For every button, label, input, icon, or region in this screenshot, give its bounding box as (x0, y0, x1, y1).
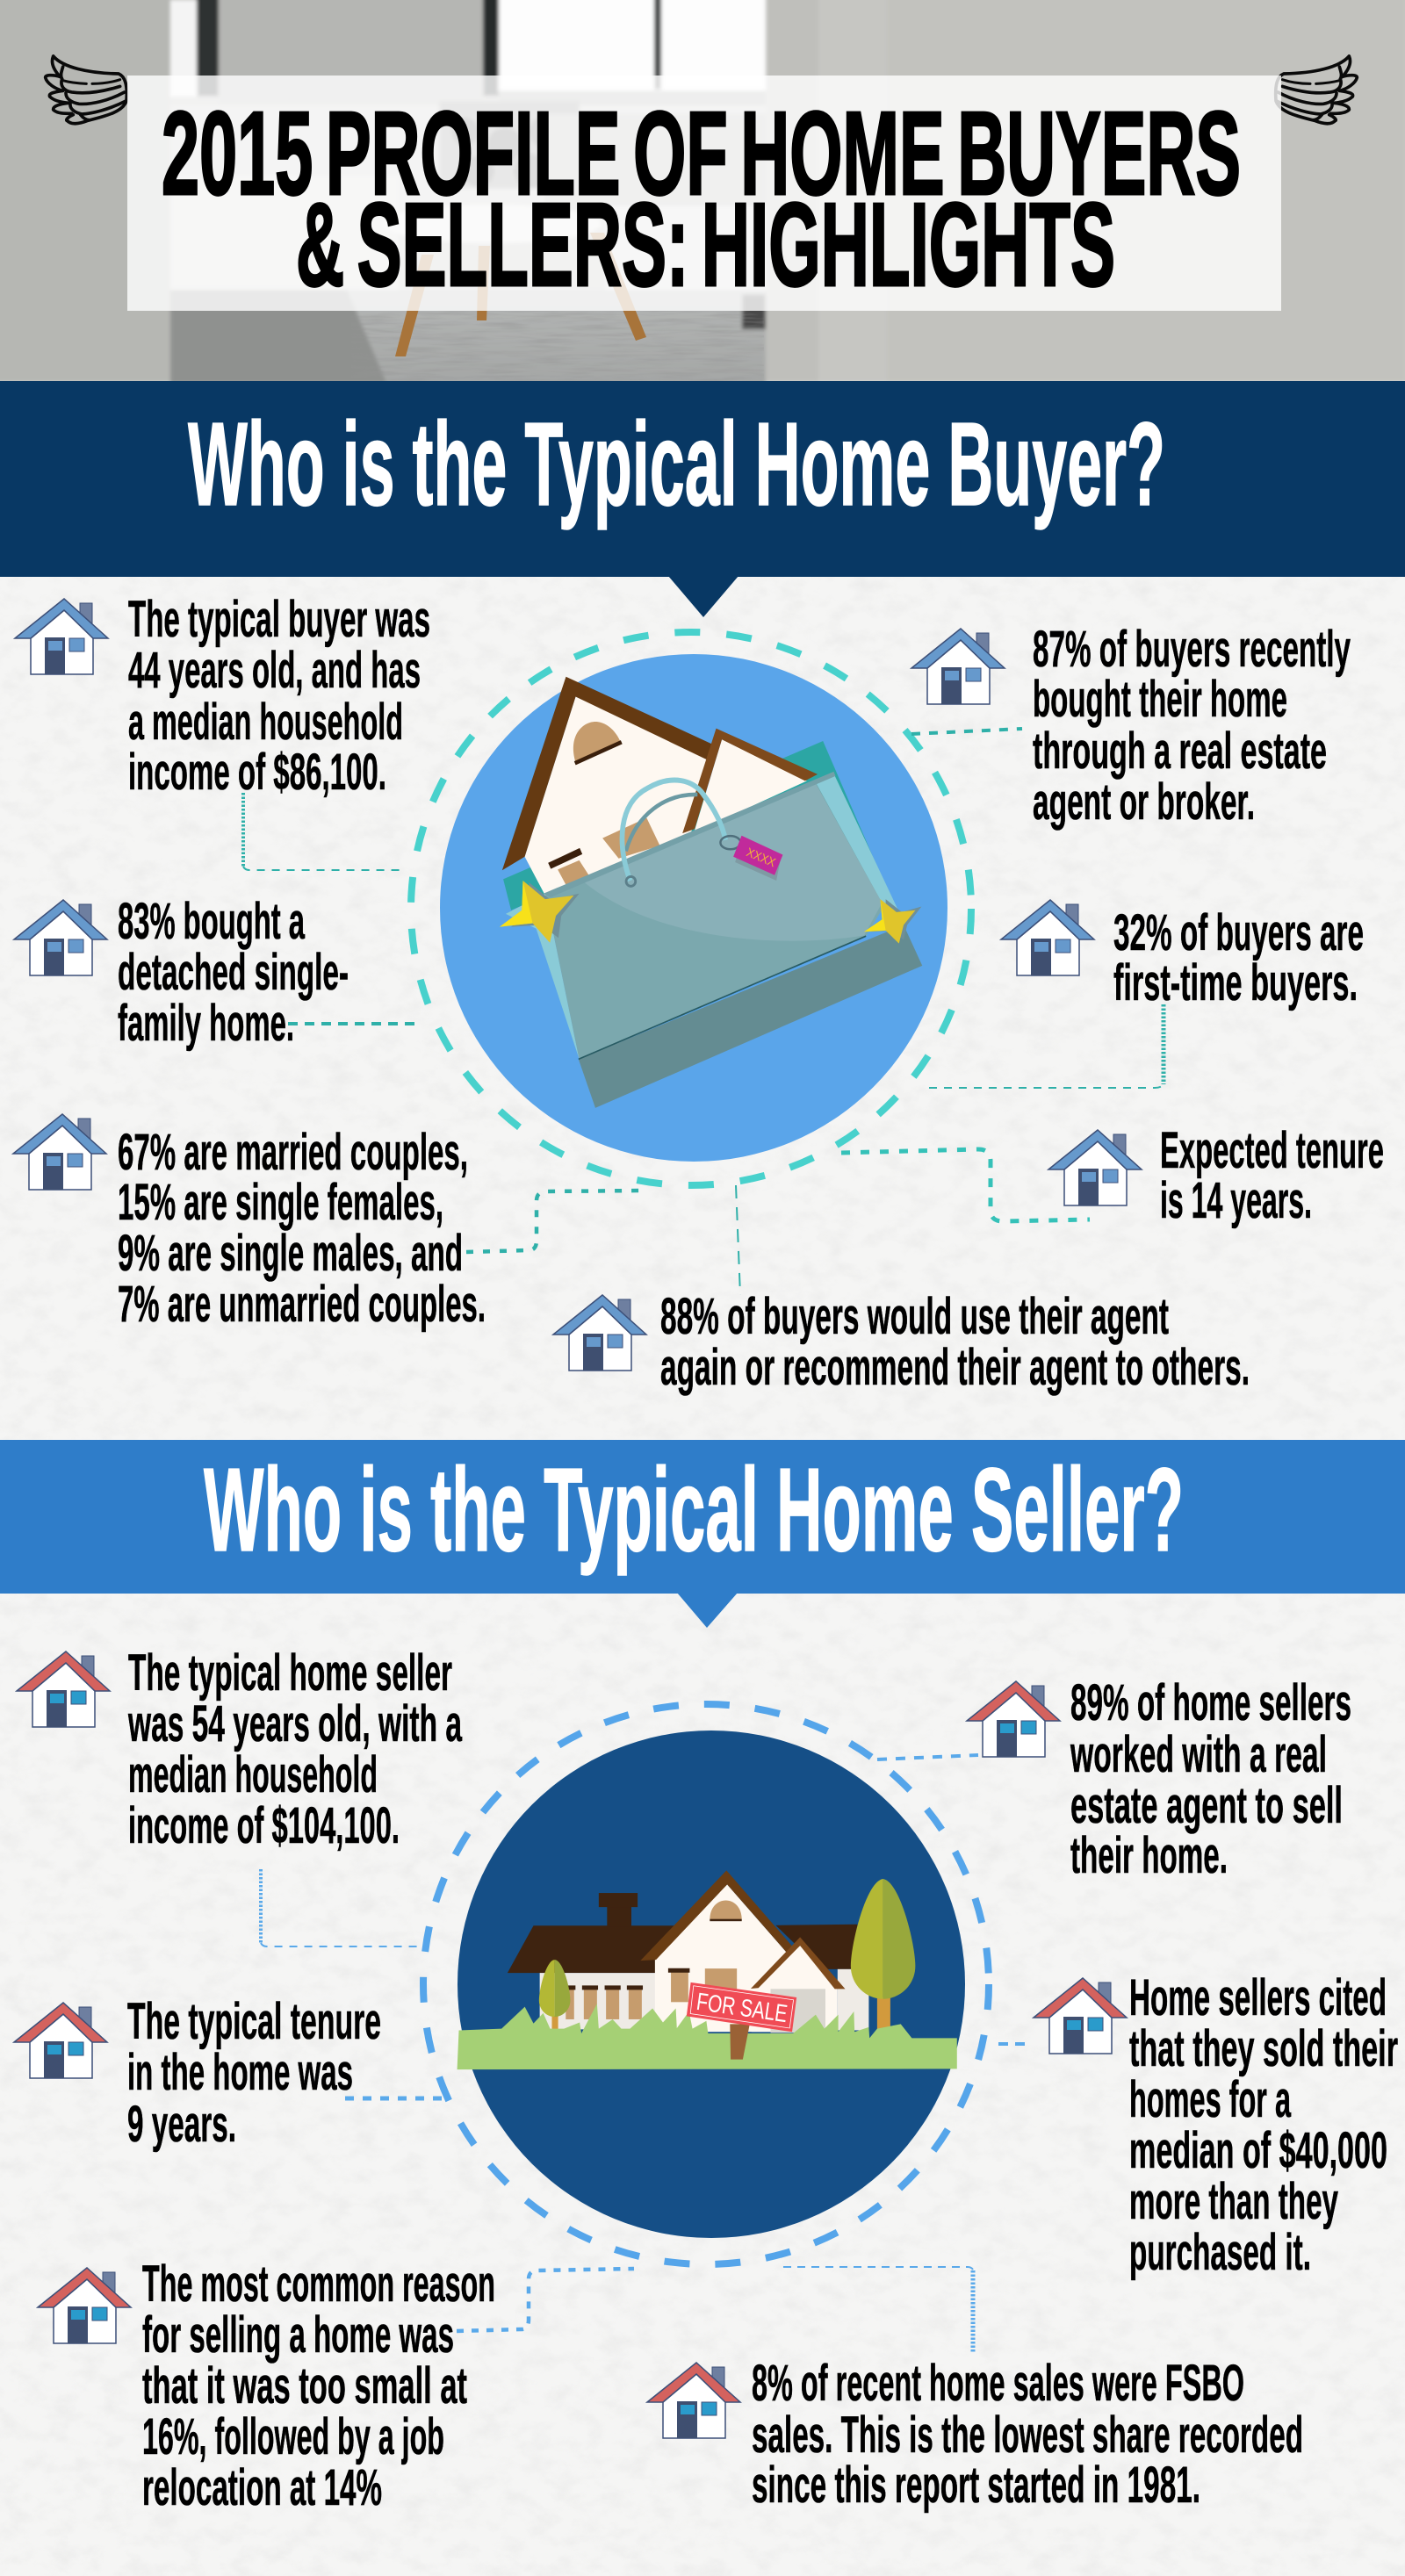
text: reason for selling (142, 2256, 495, 2516)
connector (783, 2267, 973, 2353)
text: agent recommendation (660, 1288, 1250, 1396)
text: detached home (118, 893, 349, 1052)
bag handles (623, 781, 740, 886)
text: age and income: median household (128, 1746, 378, 1803)
callout: detached home (14, 893, 420, 1052)
sign board (687, 1982, 796, 2032)
text: detached home: family home. (118, 995, 294, 1052)
text: typical tenure: in the home was (127, 2044, 353, 2101)
callout: household types (13, 1114, 643, 1333)
title (162, 87, 1241, 311)
callout: FSBO sales (647, 2267, 1303, 2514)
connector (736, 1185, 740, 1295)
seller ring (423, 1704, 989, 2264)
callout: buyer age and income (15, 591, 430, 870)
text: reason for selling: that it was too small at (142, 2357, 467, 2414)
icon: house (1048, 1130, 1142, 1205)
buyer ring (411, 632, 971, 1185)
small gable and garage (751, 1937, 846, 2033)
text: reason for selling: The most common reason (142, 2256, 495, 2313)
connector (345, 2097, 442, 2100)
header photo: living room (0, 0, 1405, 386)
icon: house (17, 1651, 110, 1727)
text: first-time buyers (1113, 904, 1364, 1011)
text: detached home: 83% bought a (118, 893, 305, 950)
callout: first-time buyers (929, 900, 1364, 1088)
connector (841, 1149, 1090, 1221)
main gable (640, 1870, 793, 2032)
text: age and income: income of $104,100. (128, 1797, 400, 1854)
text: age and income: income of $86,100. (128, 744, 386, 801)
sign label: FOR SALE (695, 1988, 789, 2027)
roof and chimney (508, 1893, 857, 1973)
text: household types: 7% are unmarried couples. (118, 1276, 486, 1333)
callout: seller age and income (17, 1644, 462, 1946)
banner: typical home seller (0, 1440, 1405, 1628)
grass (458, 2004, 957, 2069)
text: expected tenure (1160, 1122, 1384, 1229)
icon: house (14, 2003, 107, 2078)
seller circle (458, 1731, 965, 2238)
price tag: XXXX (745, 845, 778, 870)
connector (877, 1755, 978, 1759)
text: agent-assisted sale (1070, 1674, 1351, 1884)
icon: house (1001, 900, 1094, 975)
text: reason for selling: relocation at 14% (142, 2459, 382, 2516)
icon: house (967, 1681, 1060, 1757)
rug texture (351, 311, 764, 381)
text: age and income: The typical buyer was (128, 591, 430, 648)
bag body (506, 772, 922, 1108)
icon: house (15, 599, 108, 674)
table legs (395, 233, 646, 356)
text: age and income: The typical home seller (128, 1644, 452, 1702)
text: reason for selling: 16%, followed by a job (142, 2408, 444, 2465)
callout: typical tenure (14, 1993, 442, 2153)
sign post (730, 2024, 750, 2060)
text: age and income: 44 years old, and has (128, 642, 421, 699)
connector (911, 729, 1022, 734)
buyer circle (440, 654, 947, 1162)
text: agent purchase (1033, 621, 1351, 831)
small tree (539, 1960, 570, 2033)
callout: expected tenure (841, 1122, 1384, 1229)
connector (261, 1869, 424, 1946)
star right (864, 899, 921, 944)
text: household types: 67% are married couples, (118, 1124, 468, 1181)
icon: house (911, 629, 1005, 704)
text: typical tenure (127, 1993, 381, 2153)
icon: house (1034, 1978, 1127, 2054)
connector (929, 1004, 1164, 1088)
text: typical tenure: 9 years. (127, 2096, 236, 2153)
text: household types: 15% are single females, (118, 1174, 443, 1231)
connector (466, 1191, 643, 1252)
text: age and income: a median household (128, 694, 403, 751)
illustration: house for sale (458, 1870, 957, 2069)
icon: house (13, 1114, 106, 1190)
callout: sale price gain (998, 1969, 1398, 2281)
callout: reason for selling (38, 2256, 634, 2516)
banner: typical home buyer (0, 381, 1405, 617)
text: sale price gain (1129, 1969, 1398, 2281)
large tree (851, 1879, 915, 2033)
left wing of house (540, 1973, 656, 2029)
text: household types (118, 1124, 486, 1333)
connector (288, 1022, 420, 1025)
callout: agent-assisted sale (877, 1674, 1351, 1884)
wing left (46, 56, 126, 124)
price tag (733, 836, 782, 881)
connector (457, 2269, 634, 2331)
text: reason for selling: for selling a home was (142, 2306, 454, 2364)
connector (998, 2042, 1032, 2046)
icon: house (647, 2363, 740, 2438)
icon: house (14, 900, 107, 975)
text: detached home: detached single- (118, 944, 349, 1001)
icon: house (553, 1295, 646, 1371)
small house (682, 729, 818, 833)
text: typical tenure: The typical tenure (127, 1993, 381, 2050)
icon: house (38, 2268, 131, 2343)
wing right (1276, 56, 1357, 124)
star left (500, 881, 580, 943)
text: age and income (128, 591, 430, 801)
text: agent-assisted sale: their home. (1070, 1827, 1228, 1884)
callout: real estate agent purchase (911, 621, 1351, 831)
text: household types: 9% are single males, and (118, 1225, 463, 1282)
callout: agent recommendation (553, 1185, 1250, 1396)
connector (243, 793, 404, 870)
large house (502, 677, 712, 896)
title panel (127, 76, 1281, 311)
text: age and income: was 54 years old, with a (127, 1695, 462, 1752)
text: age and income (127, 1644, 462, 1854)
text: FSBO sales (752, 2355, 1303, 2514)
illustration: shopping bag with houses (500, 677, 922, 1108)
